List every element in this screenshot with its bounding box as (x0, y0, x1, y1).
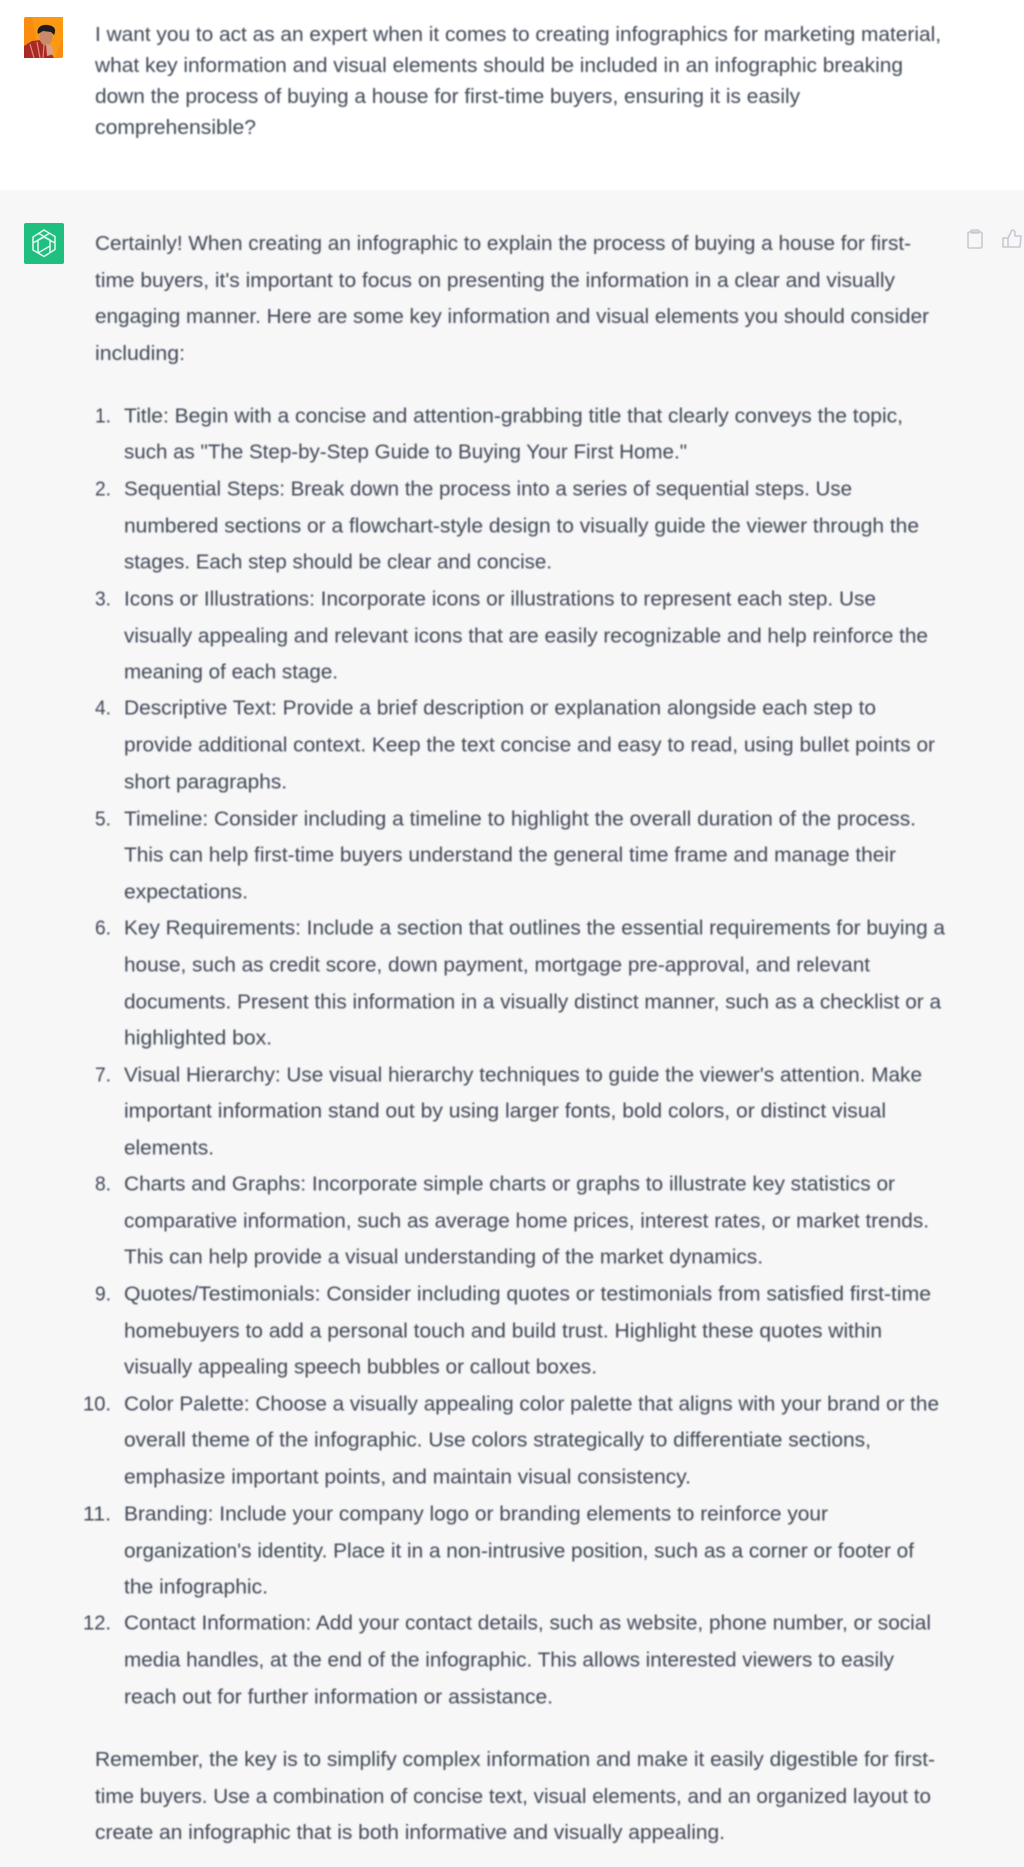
item 3: icons or illustrations: visually appealing and relevant icons that are easily recognizable and help reinforce the (124, 626, 928, 648)
intro paragraph: including: (95, 343, 185, 365)
item 8: charts and graphs: This can help provide a visual understanding of the market dynamics. (124, 1246, 763, 1268)
icon: copy clipboard (968, 230, 982, 248)
item 7: visual hierarchy (95, 1064, 922, 1160)
panel: user message (0, 0, 1024, 190)
icon: thumbs up (1003, 230, 1021, 247)
closing paragraph: time buyers. Use a combination of concise text, visual elements, and an organized layout to (95, 1786, 931, 1808)
item 12: contact information (83, 1612, 931, 1708)
item 1: title: 1. (95, 406, 111, 428)
item 8: charts and graphs: 8. (95, 1174, 111, 1196)
item 5: timeline: This can help first-time buyers understand the general time frame and manage their (124, 844, 896, 866)
item 5: timeline (95, 808, 916, 904)
item 8: charts and graphs (95, 1174, 929, 1268)
item 10: color palette: emphasize important points, and maintain visual consistency. (124, 1466, 691, 1488)
item 10: color palette: 10. (83, 1394, 111, 1416)
closing paragraph (95, 1749, 935, 1844)
item 4: descriptive text: Descriptive Text: Provide a brief description or explanation alongside each step to (124, 698, 876, 720)
item 4: descriptive text: provide additional context. Keep the text concise and easy to read, using bullet points or (124, 734, 935, 756)
item 7: visual hierarchy: Visual Hierarchy: Use visual hierarchy techniques to guide the viewer's attention. Make (124, 1064, 922, 1086)
item 3: icons or illustrations: meaning of each stage. (124, 662, 338, 684)
item 2: sequential steps: numbered sections or a flowchart-style design to visually guide the viewer through the (124, 516, 919, 538)
icon: assistant logo (24, 223, 64, 264)
item 12: contact information: Contact Information: Add your contact details, such as website, phone number, or social (124, 1612, 931, 1634)
item 8: charts and graphs: Charts and Graphs: Incorporate simple charts or graphs to illustrate key statistics or (124, 1174, 895, 1196)
item 9: quotes and testimonials: Quotes/Testimonials: Consider including quotes or testimonials from satisfied first-time (124, 1284, 931, 1306)
item 4: descriptive text: 4. (95, 698, 111, 720)
item 2: sequential steps: Sequential Steps: Break down the process into a series of sequential steps. Use (124, 478, 852, 500)
item 5: timeline: expectations. (124, 882, 248, 904)
item 6: key requirements: 6. (95, 918, 111, 940)
item 6: key requirements: house, such as credit score, down payment, mortgage pre-approval, and relevant (124, 954, 870, 976)
item 11: branding: organization's identity. Place it in a non-intrusive position, such as a corner or footer of (124, 1540, 914, 1562)
intro paragraph: engaging manner. Here are some key information and visual elements you should consider (95, 306, 929, 328)
user prompt text: what key information and visual elements should be included in an infographic breaking (94, 55, 903, 77)
item 12: contact information: 12. (83, 1612, 111, 1634)
item 11: branding: the infographic. (124, 1576, 268, 1598)
item 2: sequential steps: stages. Each step should be clear and concise. (124, 552, 552, 574)
item 7: visual hierarchy: important information stand out by using larger fonts, bold colors, or distinct visual (124, 1100, 886, 1122)
item 6: key requirements (95, 918, 946, 1050)
item 8: charts and graphs: comparative information, such as average home prices, interest rates, or market trends. (124, 1210, 929, 1232)
item 5: timeline: Timeline: Consider including a timeline to highlight the overall duration of the process. (124, 808, 916, 830)
item 1: title (95, 406, 903, 464)
icon: user avatar (24, 17, 63, 58)
user prompt text: comprehensible? (95, 117, 256, 139)
item 9: quotes and testimonials: homebuyers to add a personal touch and build trust. Highlight these quotes within (124, 1320, 882, 1342)
item 12: contact information: reach out for further information or assistance. (124, 1686, 553, 1708)
numbered list (83, 406, 946, 1708)
item 11: branding (83, 1504, 914, 1598)
item 5: timeline: 5. (95, 808, 111, 830)
item 6: key requirements: documents. Present this information in a visually distinct manner, such as a checklist or a (124, 992, 942, 1014)
item 4: descriptive text (95, 698, 935, 794)
item 10: color palette (83, 1394, 939, 1488)
item 7: visual hierarchy: elements. (124, 1138, 214, 1160)
item 6: key requirements: highlighted box. (124, 1028, 272, 1050)
intro paragraph: time buyers, it's important to focus on presenting the information in a clear and visually (95, 270, 895, 292)
item 4: descriptive text: short paragraphs. (124, 772, 287, 794)
item 7: visual hierarchy: 7. (95, 1064, 111, 1086)
item 2: sequential steps: 2. (95, 478, 111, 500)
user prompt text: I want you to act as an expert when it comes to creating infographics for marketing material, (95, 24, 941, 46)
item 2: sequential steps (95, 478, 919, 574)
item 10: color palette: overall theme of the infographic. Use colors strategically to differentiate sections, (124, 1430, 871, 1452)
intro paragraph: Certainly! When creating an infographic to explain the process of buying a house for first- (95, 233, 911, 255)
user prompt text (94, 24, 941, 139)
item 10: color palette: Color Palette: Choose a visually appealing color palette that aligns with your brand or the (124, 1394, 939, 1416)
item 11: branding: 11. (83, 1504, 111, 1526)
closing paragraph: Remember, the key is to simplify complex information and make it easily digestible for first- (95, 1749, 935, 1771)
item 9: quotes and testimonials: 9. (95, 1284, 111, 1306)
item 6: key requirements: Key Requirements: Include a section that outlines the essential requirements for buying a (124, 918, 946, 940)
item 9: quotes and testimonials (95, 1284, 931, 1378)
user prompt text: down the process of buying a house for first-time buyers, ensuring it is easily (95, 86, 800, 108)
item 12: contact information: media handles, at the end of the infographic. This allows interested viewers to easily (124, 1650, 894, 1672)
item 11: branding: Branding: Include your company logo or branding elements to reinforce your (124, 1504, 828, 1526)
item 3: icons or illustrations: Icons or Illustrations: Incorporate icons or illustrations to represent each step. Use (124, 588, 876, 610)
item 3: icons or illustrations: 3. (95, 588, 111, 610)
item 1: title: such as "The Step-by-Step Guide to Buying Your First Home." (124, 442, 687, 464)
item 1: title: Title: Begin with a concise and attention-grabbing title that clearly conveys the topic, (124, 406, 903, 428)
item 3: icons or illustrations (95, 588, 928, 684)
intro paragraph (95, 233, 929, 365)
item 9: quotes and testimonials: visually appealing speech bubbles or callout boxes. (124, 1356, 597, 1378)
closing paragraph: create an infographic that is both informative and visually appealing. (95, 1822, 725, 1844)
